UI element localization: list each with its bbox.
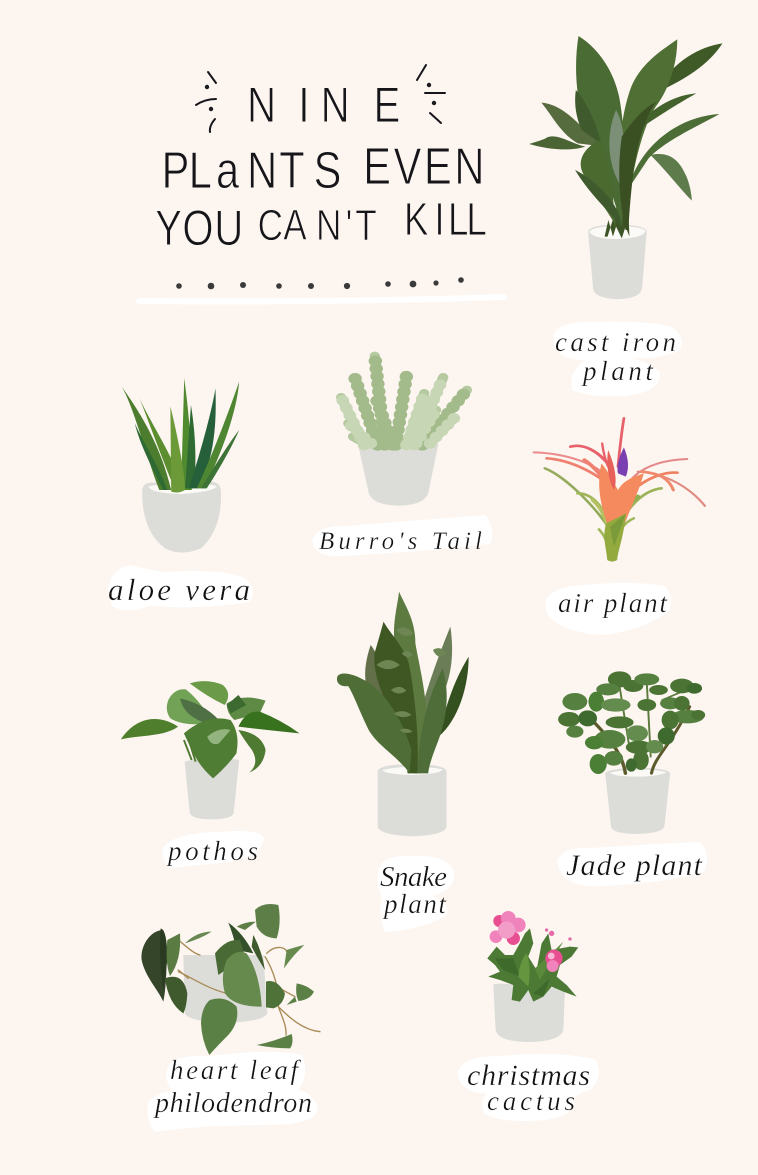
label: air plant: air plant xyxy=(558,588,668,618)
pot xyxy=(493,984,565,1042)
pot xyxy=(185,758,239,819)
row of dots xyxy=(176,277,464,289)
plant: heart leaf philodendron xyxy=(141,904,320,1055)
pot xyxy=(605,768,670,834)
pot xyxy=(358,443,438,506)
white underline xyxy=(139,297,504,302)
pot rim xyxy=(610,769,666,777)
foliage xyxy=(122,378,239,493)
title text: PLaNTS xyxy=(162,141,341,199)
trailing stems xyxy=(341,356,467,445)
label: pothos: pothos xyxy=(166,836,258,866)
foliage xyxy=(529,36,722,238)
plant: snake plant xyxy=(337,592,469,836)
label: cast iron plant xyxy=(553,322,682,396)
label: cast iron plant: plant xyxy=(581,356,654,386)
title text: EVEN xyxy=(363,137,484,195)
title sparkles left and right xyxy=(196,65,445,132)
plant: christmas cactus xyxy=(487,911,578,1042)
label: air plant xyxy=(546,583,671,635)
label: snake plant xyxy=(378,856,454,932)
plant: aloe vera xyxy=(122,378,239,552)
branches xyxy=(588,683,690,773)
pot xyxy=(142,482,221,552)
title text: NINE xyxy=(247,77,400,133)
pot rim xyxy=(589,226,645,239)
pot rim xyxy=(148,482,217,494)
plant: burro's tail xyxy=(341,356,467,506)
plant: air plant xyxy=(534,418,705,562)
foliage xyxy=(487,928,578,1002)
label: christmas cactus: christmas xyxy=(467,1059,590,1092)
pot xyxy=(588,224,647,299)
vines xyxy=(178,940,320,1035)
outer leaves xyxy=(534,418,705,550)
title text: YOU xyxy=(155,200,243,256)
label: burro's tail xyxy=(312,515,492,556)
pot xyxy=(183,955,267,1023)
label: cast iron plant: cast iron xyxy=(555,327,676,357)
title text: KILL xyxy=(404,193,487,245)
title xyxy=(139,65,504,302)
centre and base xyxy=(599,447,644,562)
pot rim xyxy=(382,767,443,775)
label: aloe vera: aloe vera xyxy=(108,572,250,607)
label: snake plant: Snake xyxy=(380,861,447,893)
label: christmas cactus xyxy=(458,1054,599,1121)
label: jade plant: Jade plant xyxy=(566,849,703,882)
title text: CAN'T xyxy=(258,201,377,250)
leaves xyxy=(141,904,314,1055)
label: jade plant xyxy=(557,842,707,886)
label: snake plant: plant xyxy=(382,889,447,919)
label: heart leaf philodendron: philodendron xyxy=(153,1088,312,1119)
plant: pothos xyxy=(121,681,299,819)
label: burro's tail: Burro's Tail xyxy=(319,528,482,555)
label: heart leaf philodendron: heart leaf xyxy=(170,1055,301,1085)
label: christmas cactus: cactus xyxy=(487,1086,575,1116)
flowers xyxy=(490,911,572,972)
pot xyxy=(378,764,446,836)
leaves xyxy=(558,671,705,774)
plant: jade plant xyxy=(558,671,705,834)
foliage xyxy=(121,681,299,778)
label: heart leaf philodendron xyxy=(147,1052,318,1132)
foliage xyxy=(337,592,469,773)
plant: cast iron plant xyxy=(529,36,722,299)
